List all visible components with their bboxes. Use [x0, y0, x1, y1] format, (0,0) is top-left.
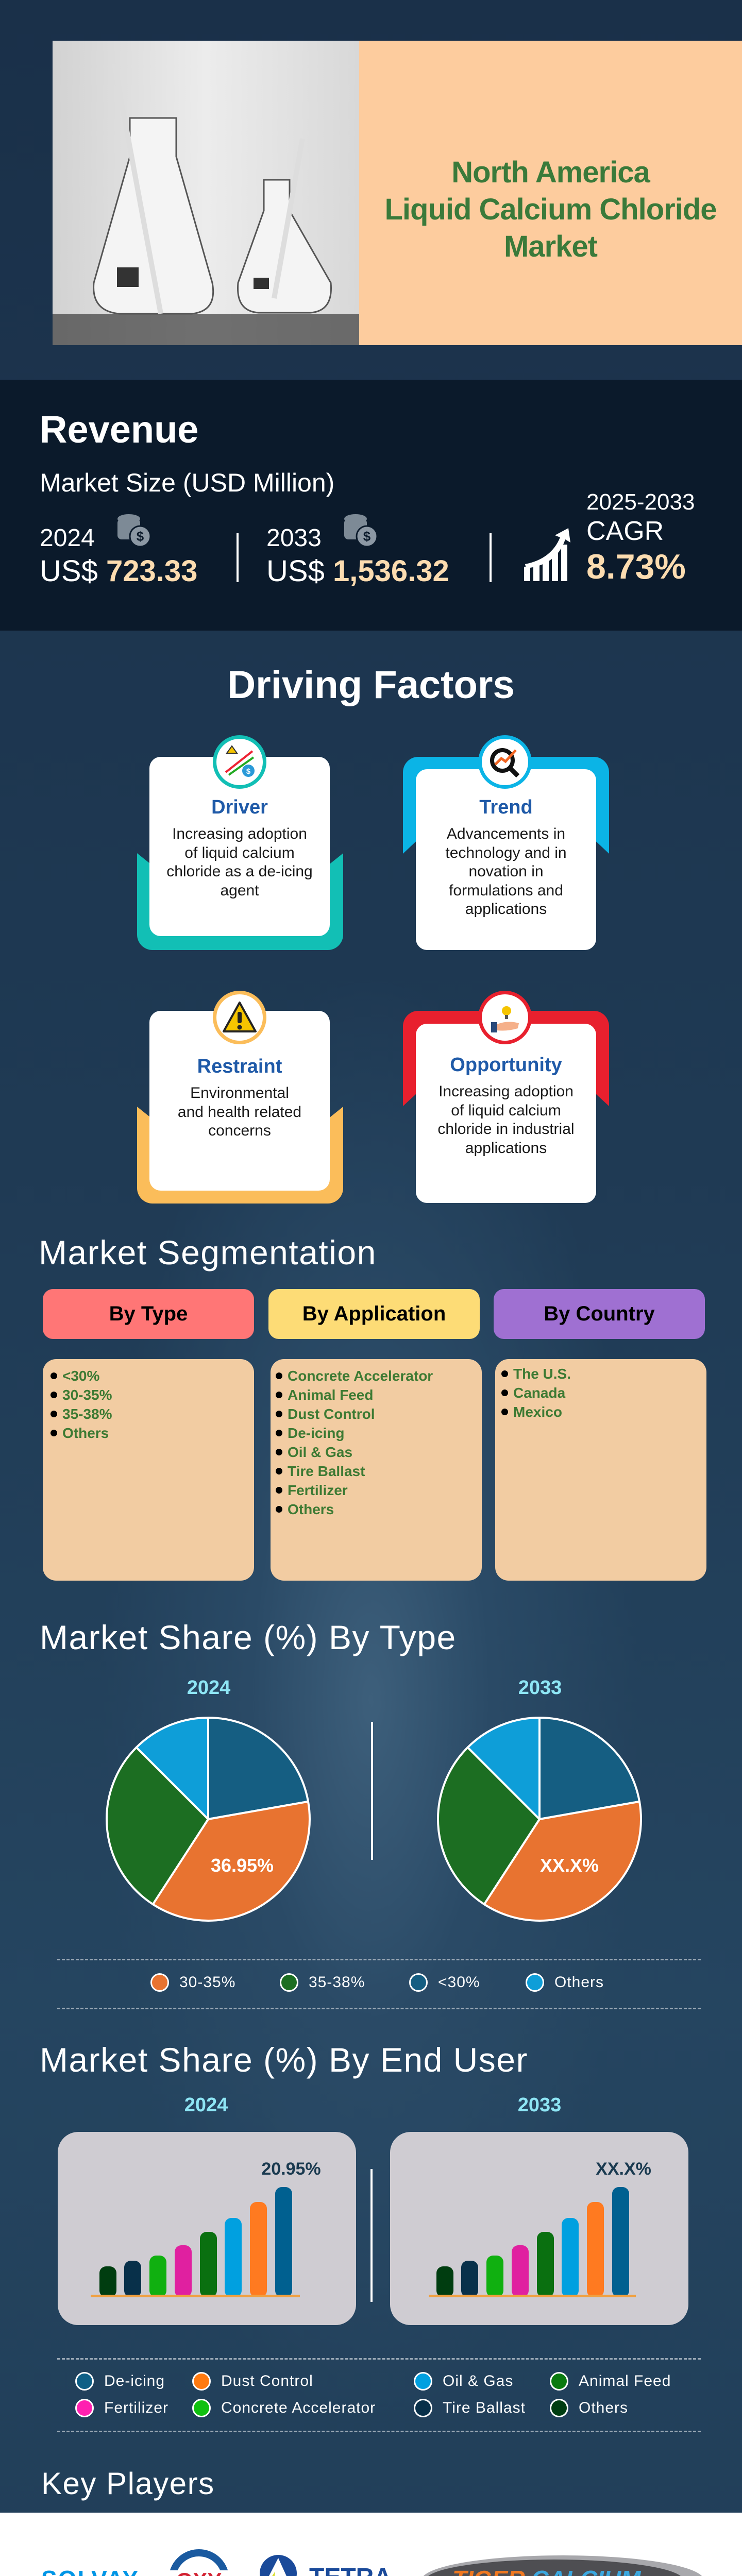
panel: restraint	[137, 991, 343, 1204]
market share by type heading: Market Share (%) By Type	[40, 1618, 457, 1656]
pie chart 2024	[105, 1717, 311, 1922]
icon: idea hand	[478, 991, 532, 1044]
list: application: Tire Ballast	[288, 1463, 365, 1479]
2033 value: US$ 1,536.32	[266, 554, 449, 588]
legend: type: Others	[554, 1974, 604, 1991]
list: country: Canada	[513, 1385, 565, 1401]
tab: by country: By Country	[544, 1302, 655, 1325]
list: application: Concrete Accelerator	[288, 1368, 433, 1384]
legend: end user: Concrete Accelerator	[221, 2399, 376, 2416]
list: type: 30-35%	[62, 1387, 112, 1403]
year label 2024: 2024	[184, 2094, 228, 2116]
2024 value	[40, 514, 197, 588]
legend: type	[150, 1973, 604, 1992]
icon: coins	[344, 514, 376, 546]
divider	[490, 533, 492, 582]
legend: type: 35-38%	[309, 1974, 365, 1991]
year label 2033: 2033	[518, 1677, 562, 1699]
panel: opportunity: of liquid calcium	[451, 1101, 561, 1119]
panel: trend: formulations and	[449, 882, 563, 899]
list: country: The U.S.	[513, 1366, 571, 1382]
panel: trend: technology and in	[445, 844, 567, 861]
divider	[370, 2169, 373, 2302]
icon: warning	[213, 991, 266, 1044]
icon: trend magnifier	[478, 735, 532, 789]
divider	[371, 1722, 373, 1860]
panel: opportunity: Increasing adoption	[439, 1083, 574, 1100]
list: application: Fertilizer	[288, 1482, 348, 1498]
bar chart 2033: XX.X%	[596, 2159, 651, 2179]
tab: by application: By Application	[302, 1302, 446, 1325]
panel: opportunity: applications	[465, 1140, 547, 1156]
legend: end user: Dust Control	[221, 2372, 313, 2389]
panel: opportunity: Opportunity	[450, 1054, 562, 1076]
logo: tetra	[260, 2555, 392, 2576]
panel: driver: of liquid calcium	[184, 844, 295, 861]
title panel	[359, 41, 742, 345]
logo: oxy	[170, 2549, 228, 2576]
panel: driver: Increasing adoption	[172, 825, 307, 842]
icon: driver gears: $	[246, 767, 251, 776]
CAGR block: 2025-2033	[586, 489, 695, 515]
list: application: Oil & Gas	[288, 1444, 352, 1460]
panel: driver: chloride as a de-icing	[166, 863, 313, 880]
2033 value	[266, 514, 449, 588]
title panel: North America	[451, 156, 650, 189]
icon: coins: $	[363, 529, 371, 544]
legend: end user: Oil & Gas	[443, 2372, 513, 2389]
legend: end user: Animal Feed	[579, 2372, 671, 2389]
list: application	[271, 1359, 482, 1581]
pie chart 2033	[437, 1717, 642, 1922]
icon: driver gears	[213, 735, 266, 789]
logo: tiger calcium	[424, 2555, 702, 2576]
legend: end user: Tire Ballast	[443, 2399, 526, 2416]
panel: driver	[137, 735, 343, 950]
list: type: <30%	[62, 1368, 99, 1384]
key players heading: Key Players	[41, 2466, 215, 2501]
tab: by type: By Type	[109, 1302, 188, 1325]
list: country	[495, 1359, 706, 1581]
list: type: Others	[62, 1425, 109, 1441]
bar chart 2024	[58, 2132, 356, 2325]
list: application: Others	[288, 1501, 334, 1517]
list: application: Dust Control	[288, 1406, 375, 1422]
legend: end user: Fertilizer	[104, 2399, 168, 2416]
market segmentation heading: Market Segmentation	[39, 1233, 377, 1272]
driving factors heading: Driving Factors	[227, 663, 515, 707]
legend: end user: De-icing	[104, 2372, 165, 2389]
panel: trend: novation in	[468, 863, 544, 880]
legend: type: 30-35%	[179, 1974, 235, 1991]
2033 value: 2033	[266, 524, 322, 552]
market share by end user heading: Market Share (%) By End User	[40, 2041, 528, 2079]
tab: by application	[268, 1289, 480, 1339]
legend: type: <30%	[438, 1974, 480, 1991]
legend: end user	[75, 2372, 671, 2417]
panel: restraint: Restraint	[197, 1056, 282, 1077]
list: application: Animal Feed	[288, 1387, 373, 1403]
2024 value: US$ 723.33	[40, 554, 197, 588]
pie chart 2024: 36.95%	[211, 1855, 274, 1876]
panel: restraint: and health related	[178, 1104, 301, 1120]
year label 2024: 2024	[187, 1677, 230, 1699]
panel: driver: agent	[220, 882, 259, 899]
year label 2033: 2033	[518, 2094, 561, 2116]
divider	[237, 533, 239, 582]
list: country: Mexico	[513, 1404, 562, 1420]
icon: growth chart	[524, 528, 570, 581]
tab: by country	[494, 1289, 705, 1339]
panel: restraint: Environmental	[190, 1084, 289, 1101]
list: type: 35-38%	[62, 1406, 112, 1422]
2024 value: 2024	[40, 524, 95, 552]
list: application: De-icing	[288, 1425, 344, 1441]
panel: trend: Advancements in	[447, 825, 565, 842]
key players panel	[0, 2513, 742, 2576]
panel: restraint: concerns	[208, 1122, 271, 1139]
market size label: Market Size (USD Million)	[40, 468, 334, 497]
panel: trend	[403, 735, 609, 950]
pie chart 2033: XX.X%	[540, 1855, 599, 1876]
legend: end user: Others	[579, 2399, 628, 2416]
CAGR block: 8.73%	[586, 547, 686, 586]
panel: opportunity	[403, 991, 609, 1203]
tab: by type	[43, 1289, 254, 1339]
list: type	[43, 1359, 254, 1581]
CAGR block	[586, 489, 695, 586]
panel: driver: Driver	[211, 796, 268, 818]
icon: coins: $	[137, 529, 144, 544]
panel: opportunity: chloride in industrial	[437, 1121, 575, 1138]
title panel: Liquid Calcium Chloride	[384, 193, 717, 226]
revenue band	[0, 380, 742, 631]
title panel: Market	[504, 230, 597, 263]
panel: trend: Trend	[479, 796, 533, 818]
panel: trend: applications	[465, 901, 547, 918]
bar chart 2024: 20.95%	[261, 2159, 321, 2179]
icon: coins	[117, 514, 149, 546]
CAGR block: CAGR	[586, 516, 664, 546]
bar chart 2033	[390, 2132, 688, 2325]
header image: flasks	[53, 41, 359, 345]
revenue heading: Revenue	[40, 408, 198, 451]
